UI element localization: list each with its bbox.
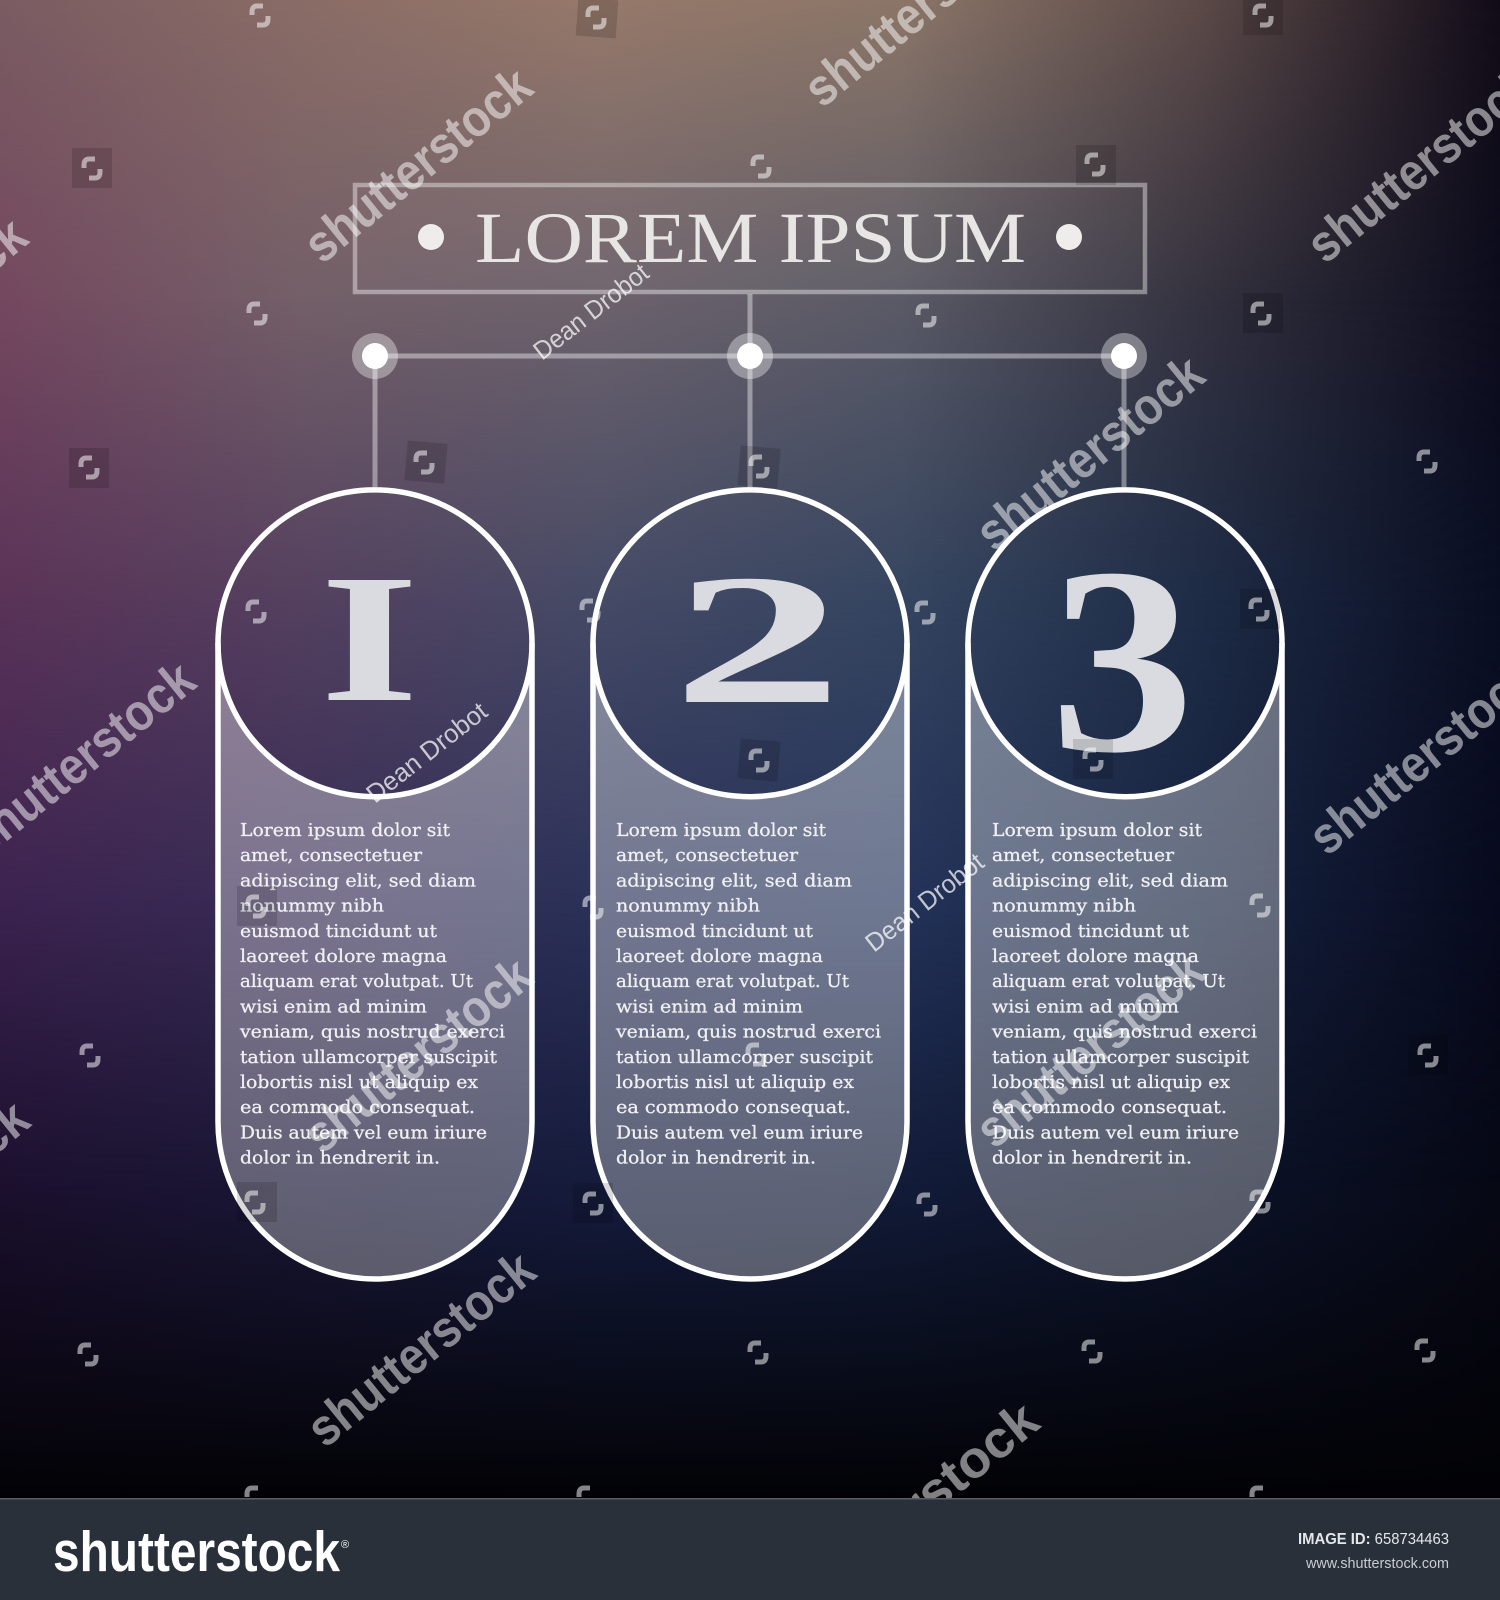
connector node 3 <box>1101 333 1147 379</box>
watermark: shutterstock repeated: shutterstock <box>296 1240 546 1458</box>
body text 2 <box>615 820 881 1169</box>
body text 1: veniam, quis nostrud exerci <box>239 1022 505 1043</box>
body text 1: nonummy nibh <box>240 896 384 917</box>
title box <box>355 185 1145 292</box>
body text 2: nonummy nibh <box>616 896 760 917</box>
body text 2: aliquam erat volutpat. Ut <box>616 971 850 992</box>
title text: LOREM IPSUM <box>475 198 1026 278</box>
body text 2: tation ullamcorper suscipit <box>616 1047 874 1068</box>
body text 3: dolor in hendrerit in. <box>992 1148 1192 1169</box>
body text 1: adipiscing elit, sed diam <box>240 870 476 891</box>
numeral 3: 3 <box>1050 514 1194 809</box>
watermark: shutterstock repeated: shutterstock <box>965 941 1215 1159</box>
body text 2: euismod tincidunt ut <box>616 921 814 942</box>
body text 2: laoreet dolore magna <box>616 946 823 967</box>
body text 2: veniam, quis nostrud exerci <box>615 1022 881 1043</box>
body text 1: Duis autem vel eum iriure <box>240 1122 487 1143</box>
body text 1: euismod tincidunt ut <box>240 921 438 942</box>
panel: pill 3 <box>968 490 1282 1279</box>
numeral 1: I <box>320 536 419 740</box>
body text 1: wisi enim ad minim <box>240 996 427 1017</box>
body text 3: tation ullamcorper suscipit <box>992 1047 1250 1068</box>
body text 1: laoreet dolore magna <box>240 946 447 967</box>
body text 1: lobortis nisl ut aliquip ex <box>240 1072 478 1093</box>
body text 3: veniam, quis nostrud exerci <box>991 1022 1257 1043</box>
body text 3 <box>991 820 1257 1169</box>
watermark: shutterstock repeated: shutterstock <box>965 344 1215 562</box>
body text 3: adipiscing elit, sed diam <box>992 870 1228 891</box>
connector node 1 <box>352 333 398 379</box>
body text 2: Lorem ipsum dolor sit <box>616 820 827 841</box>
body text 1: ea commodo consequat. <box>240 1097 475 1118</box>
body text 1: tation ullamcorper suscipit <box>240 1047 498 1068</box>
footer image id: IMAGE ID: 658734463 <box>1298 1531 1449 1548</box>
body text 1 <box>239 820 505 1169</box>
body text 3: amet, consectetuer <box>992 845 1174 866</box>
watermark: Dean Drobot <box>360 257 990 958</box>
panel: pill 2 <box>593 490 907 1279</box>
body text 2: adipiscing elit, sed diam <box>616 870 852 891</box>
body text 2: ea commodo consequat. <box>616 1097 851 1118</box>
body text 2: Duis autem vel eum iriure <box>616 1122 863 1143</box>
watermark: shutterstock repeated: rstock <box>889 1391 1050 1536</box>
watermark: Dean Drobot: Dean Drobot <box>527 257 655 366</box>
body text 3: wisi enim ad minim <box>992 996 1179 1017</box>
watermark: shutterstock repeated: shutterstock <box>293 946 543 1164</box>
body text 1: Lorem ipsum dolor sit <box>240 820 451 841</box>
body text 3: aliquam erat volutpat. Ut <box>992 971 1226 992</box>
body text 1: amet, consectetuer <box>240 845 422 866</box>
body text 3: Lorem ipsum dolor sit <box>992 820 1203 841</box>
body text 2: lobortis nisl ut aliquip ex <box>616 1072 854 1093</box>
footer registered mark: ® <box>341 1539 349 1551</box>
body text 3: Duis autem vel eum iriure <box>992 1122 1239 1143</box>
body text 3: euismod tincidunt ut <box>992 921 1190 942</box>
footer url: www.shutterstock.com <box>1305 1555 1449 1572</box>
footer logo: shutterstock <box>53 1520 340 1584</box>
numeral 2: 2 <box>672 536 843 743</box>
body text 1: aliquam erat volutpat. Ut <box>240 971 474 992</box>
body text 1: dolor in hendrerit in. <box>240 1148 440 1169</box>
body text 3: laoreet dolore magna <box>992 946 1199 967</box>
title bullet right <box>1056 224 1082 250</box>
body text 2: amet, consectetuer <box>616 845 798 866</box>
body text 2: wisi enim ad minim <box>616 996 803 1017</box>
watermark: dark icon tiles <box>69 0 1448 1223</box>
footer bar <box>0 1498 1500 1600</box>
body text 2: dolor in hendrerit in. <box>616 1148 816 1169</box>
watermark: Dean Drobot: Dean Drobot <box>360 695 494 809</box>
connector lines <box>375 294 1124 487</box>
connector node 2 <box>727 333 773 379</box>
watermark: Dean Drobot: Dean Drobot <box>859 846 990 958</box>
body text 3: nonummy nibh <box>992 896 1136 917</box>
body text 3: ea commodo consequat. <box>992 1097 1227 1118</box>
title bullet left <box>418 224 444 250</box>
body text 3: lobortis nisl ut aliquip ex <box>992 1072 1230 1093</box>
watermark: shutterstock repeated: shutterstock <box>293 56 543 274</box>
panel: pill 1 <box>218 490 532 1279</box>
